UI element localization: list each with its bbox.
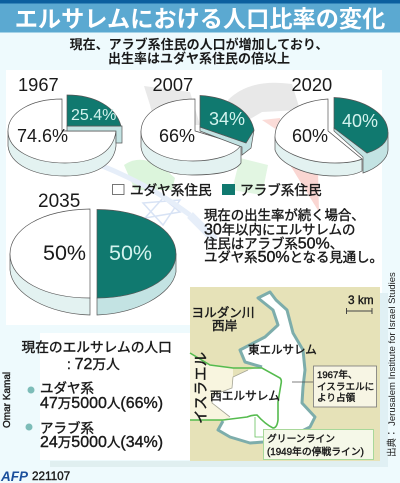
projection text: 現在の出生率が続く場合、 <box>204 207 365 223</box>
population heading: 現在のエルサレムの人口 <box>22 340 172 355</box>
legend item: Arab residents: アラブ系住民 <box>240 182 322 198</box>
legend item: Jewish residents: ユダヤ系住民 <box>130 183 212 198</box>
map: west Jerusalem boundary <box>212 370 248 417</box>
population item: Jewish: ユダヤ系 <box>40 381 94 396</box>
year label: 2035 <box>38 191 80 212</box>
year label: 2020 <box>292 74 332 95</box>
value: Jewish share: 74.6% <box>17 126 68 146</box>
scale bar <box>346 293 374 314</box>
pie chart: 2020 <box>275 74 388 176</box>
population item: Jewish: 47万5000人(66%) <box>40 395 163 412</box>
year label: 2007 <box>152 74 193 95</box>
label: East Jerusalem: 東エルサレム <box>248 344 317 356</box>
value: Arab share: 40% <box>342 111 378 131</box>
population item: Arab: アラブ系 <box>40 420 94 436</box>
population heading: : 72万人 <box>67 356 120 373</box>
value: Arab share: 34% <box>209 109 245 129</box>
callout: occupied by Israel in 1967: より占領 <box>317 392 356 404</box>
value: Jewish share: 50% <box>43 241 86 265</box>
photographer credit: Omar Kamal <box>2 372 13 428</box>
value: Jewish share: 60% <box>292 126 328 146</box>
projection text: 住民はアラブ系50%、 <box>204 236 343 252</box>
projection text <box>204 207 383 266</box>
population panel <box>22 340 172 451</box>
label: West Jerusalem: 西エルサレム <box>210 390 280 403</box>
population item: Jewish <box>28 381 163 412</box>
AFP logo and date <box>0 469 70 483</box>
value: Jewish share: 66% <box>159 126 195 146</box>
scale bar: 3 km <box>348 293 374 307</box>
source credit: 出典： Jerusalem Institute for Israel Studies <box>386 272 398 457</box>
legend <box>112 182 322 198</box>
map: green line <box>190 353 281 428</box>
map: Israel side tint <box>190 353 233 420</box>
title: エルサレムにおける人口比率の変化 <box>15 6 385 32</box>
label: Israel: イスラエル <box>194 352 210 424</box>
population heading <box>22 340 172 373</box>
value: Arab share: 25.4% <box>71 107 116 124</box>
white background panel <box>6 70 388 467</box>
AFP logo and date: 221107 <box>32 470 70 483</box>
callout: Green Line <box>264 430 374 460</box>
projection text: ユダヤ系50%となる見通し。 <box>204 249 383 266</box>
year label: 1967 <box>18 74 59 95</box>
pie chart: 1967 <box>8 74 122 176</box>
pie chart: 2007 <box>141 74 254 175</box>
callout: occupied by Israel in 1967: イスラエルに <box>317 382 374 393</box>
subtitle: 出生率はユダヤ系住民の倍以上 <box>108 51 290 66</box>
title bar <box>0 0 400 32</box>
map: municipal boundary outline <box>218 292 315 443</box>
callout: Green Line: グリーンライン <box>267 432 335 445</box>
watermark: faint flag background <box>100 83 319 240</box>
subtitle: 現在、アラブ系住民の人口が増加しており、 <box>70 37 328 52</box>
label: West Bank of Jordan River: 西岸 <box>212 319 237 333</box>
callout: Green Line: (1949年の停戦ライン) <box>267 445 364 458</box>
callout: occupied by Israel in 1967: 1967年、 <box>317 369 358 381</box>
map background <box>190 287 380 461</box>
value: Arab share: 50% <box>109 241 152 265</box>
callout: occupied by Israel in 1967 <box>292 366 376 407</box>
subtitle <box>70 37 328 66</box>
label: West Bank of Jordan River: ヨルダン川 <box>192 306 254 320</box>
population item: Arab <box>26 420 163 451</box>
map <box>190 287 380 461</box>
projection text: 30年以内にエルサレムの <box>204 222 355 238</box>
population item: Arab: 24万5000人(34%) <box>40 434 163 451</box>
map: Jerusalem municipal area <box>212 292 315 443</box>
pie chart: 2035 <box>10 191 176 315</box>
label: West Bank of Jordan River <box>192 306 254 333</box>
